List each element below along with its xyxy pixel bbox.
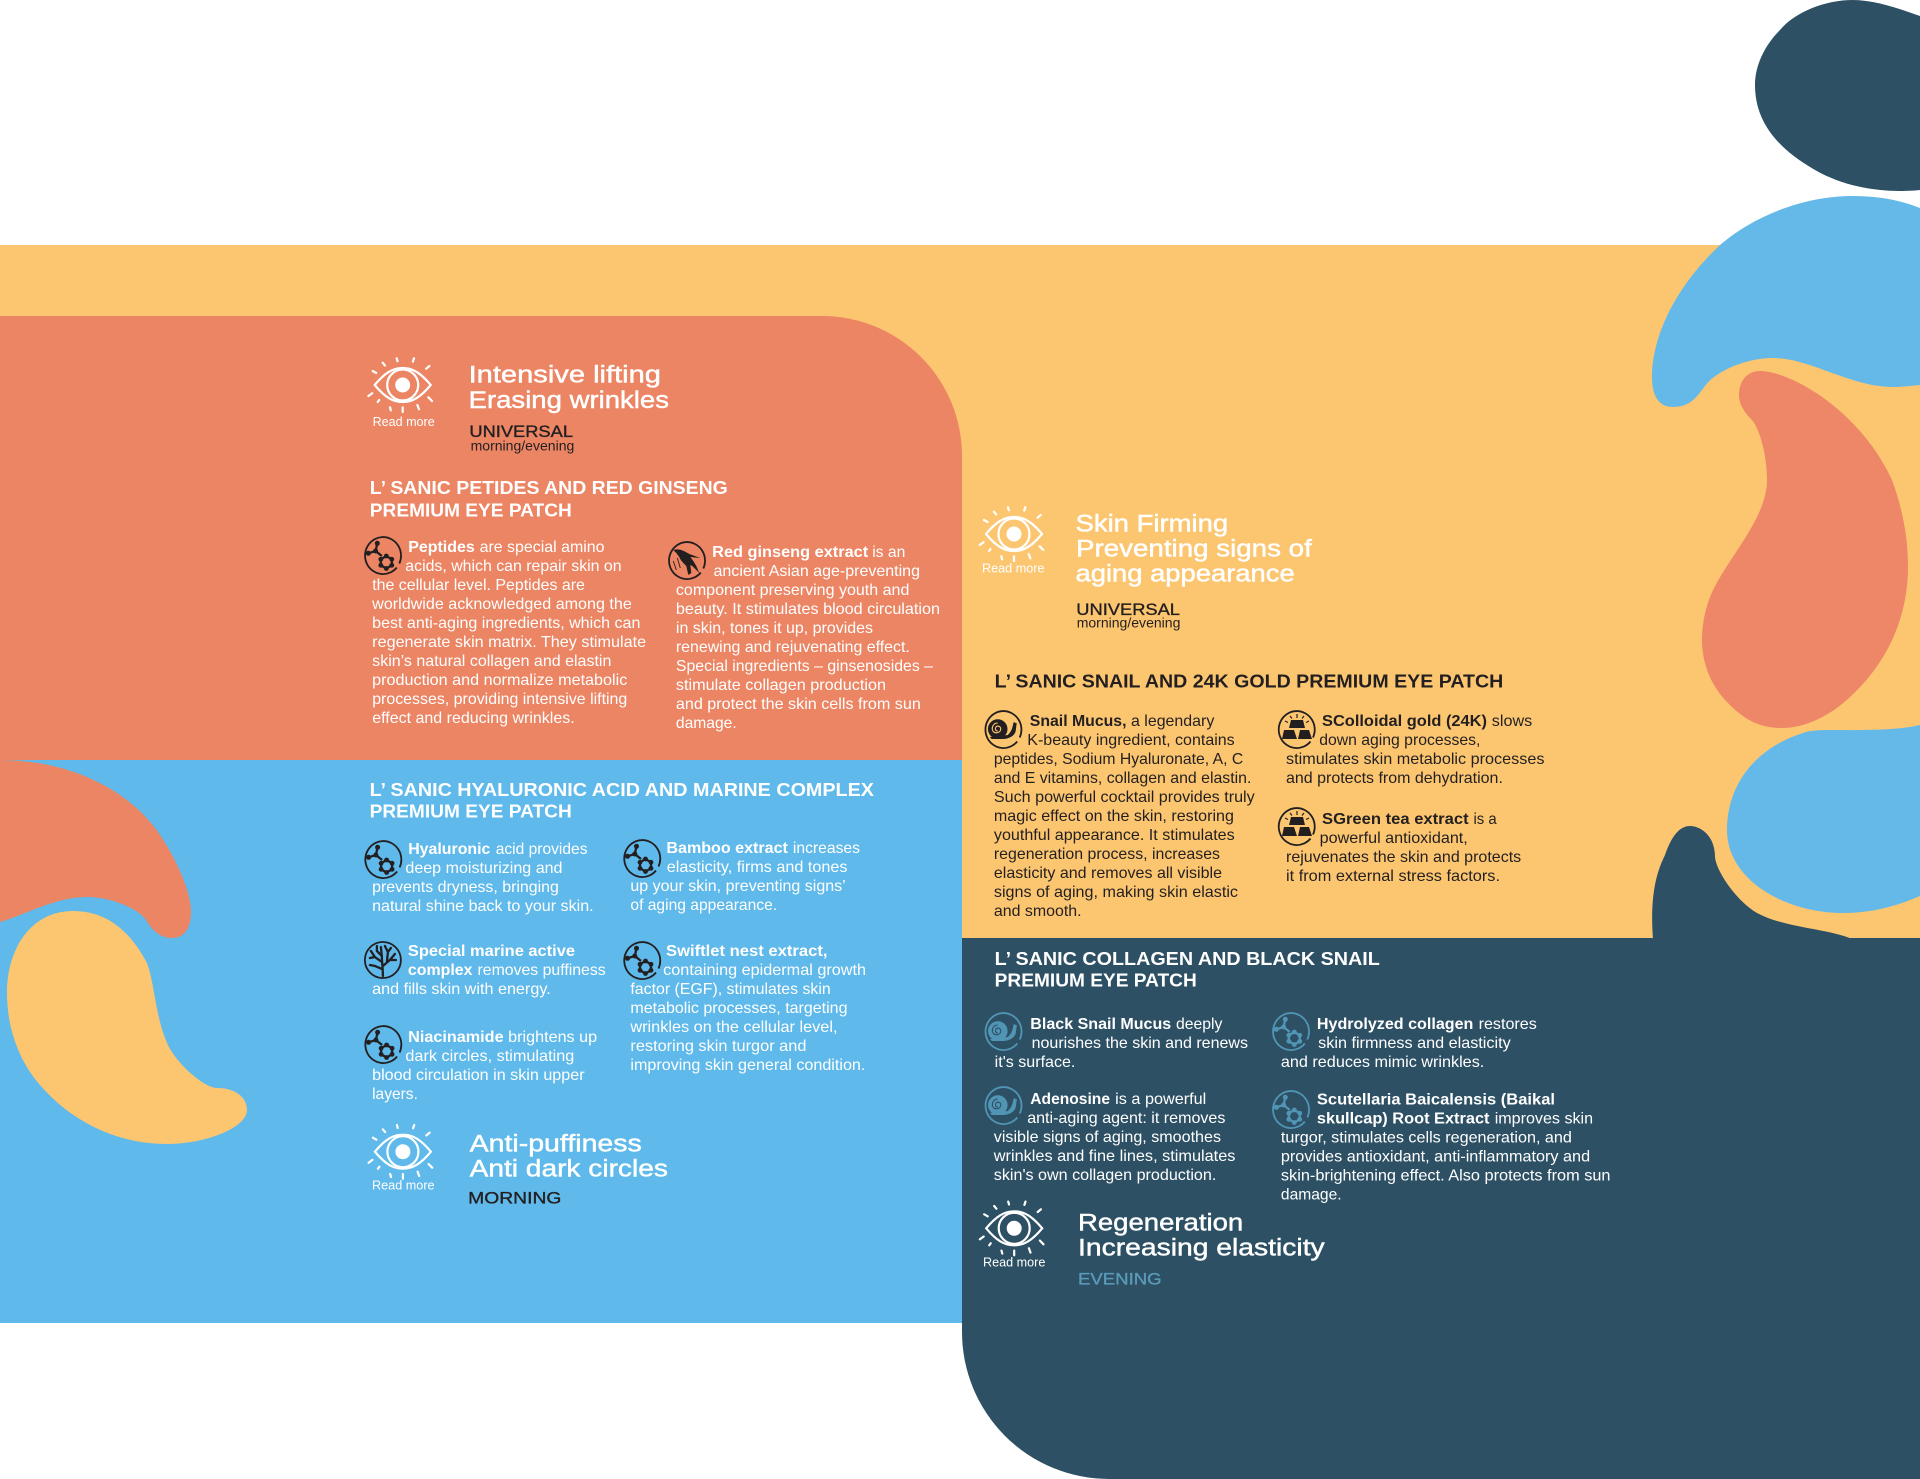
text block: snail mucus: peptides, Sodium Hyaluronate, A, C (994, 751, 1243, 768)
text block: snail mucus: Such powerful cocktail provides truly (994, 789, 1255, 806)
blob: blue upper right (1652, 196, 1920, 407)
text block: green tea: it from external stress factors. (1286, 868, 1500, 885)
text block: swiftlet nest (629, 943, 866, 1074)
heading: collagen and black snail patch: L’ SANIC COLLAGEN AND BLACK SNAIL (995, 949, 1380, 969)
text block: hyaluronic acid: natural shine back to your skin. (372, 898, 594, 915)
text block: scutellaria: provides antioxidant, anti-inflammatory and (1281, 1149, 1590, 1166)
blob: yellow left (7, 911, 247, 1144)
eye icon with read more: firming: Read more (982, 561, 1044, 576)
usage label: universal: UNIVERSAL (469, 422, 573, 441)
text block: hydrolyzed collagen: skin firmness and elasticity (1318, 1035, 1511, 1052)
text block: colloidal gold: and protects from dehydration. (1286, 770, 1503, 787)
text block: black snail mucus (995, 1016, 1248, 1071)
text block: scutellaria: skin-brightening effect. Also protects from sun (1281, 1168, 1610, 1185)
icon: molecule (1273, 1091, 1309, 1128)
title: anti-puffiness benefits (470, 1131, 668, 1183)
icon: molecule (624, 942, 660, 979)
blob: dark lump above dark panel (1652, 826, 1852, 939)
heading: peptides and ginseng patch: PREMIUM EYE PATCH (370, 501, 572, 521)
heading: hyaluronic and marine patch: L’ SANIC HYALURONIC ACID AND MARINE COMPLEX (370, 780, 874, 800)
icon: gold bars (green tea) (1279, 808, 1315, 845)
text block: peptides: processes, providing intensive lifting (372, 691, 627, 708)
usage label: evening: EVENING (1078, 1269, 1162, 1288)
text block: green tea: SGreen tea extract (1322, 811, 1469, 828)
icon: molecule (365, 841, 401, 878)
text block: swiftlet nest: restoring skin turgor and (630, 1038, 806, 1055)
title: firming benefits (1076, 511, 1312, 588)
panel: anti-puffiness (blue) (0, 760, 962, 1323)
text block: niacinamide: Niacinamide (408, 1029, 504, 1046)
text block: snail mucus: K-beauty ingredient, contains (1027, 732, 1235, 749)
text block: black snail mucus: it's surface. (995, 1054, 1075, 1071)
text block: snail mucus: regeneration process, increases (994, 846, 1220, 863)
blob: dark top right (1755, 0, 1920, 191)
text block: swiftlet nest: factor (EGF), stimulates skin (630, 981, 831, 998)
text block: hyaluronic acid: Hyaluronic (408, 841, 491, 858)
text block: peptides: best anti-aging ingredients, which can (372, 615, 640, 632)
text block: hyaluronic acid (372, 841, 594, 915)
eye icon with read more: regeneration (980, 1202, 1045, 1270)
text block: green tea: is a (1474, 811, 1497, 828)
text block: marine complex: complex (408, 962, 473, 979)
eye icon with read more: lifting: Read more (373, 414, 435, 429)
text block: red ginseng: in skin, tones it up, provides (676, 620, 873, 637)
text block: swiftlet nest: Swiftlet nest extract, (666, 943, 828, 960)
text block: red ginseng: and protect the skin cells from sun (676, 696, 921, 713)
text block: snail mucus: and E vitamins, collagen and elastin. (994, 770, 1251, 787)
text block: peptides: the cellular level. Peptides are (372, 577, 585, 594)
icon: snail (985, 711, 1021, 748)
text block: adenosine: visible signs of aging, smoothes (994, 1129, 1221, 1146)
text block: hyaluronic acid: deep moisturizing and (405, 860, 562, 877)
text block: marine complex: removes puffiness (478, 962, 606, 979)
panel: regeneration (dark) (962, 938, 1920, 1479)
text block: scutellaria: skullcap) Root Extract (1317, 1111, 1490, 1128)
text block: hydrolyzed collagen: restores (1479, 1016, 1537, 1033)
text block: black snail mucus: nourishes the skin and renews (1032, 1035, 1248, 1052)
text block: colloidal gold (1286, 713, 1544, 787)
text block: adenosine: wrinkles and fine lines, stimulates (993, 1148, 1235, 1165)
title: lifting benefits: Erasing wrinkles (469, 387, 669, 414)
text block: snail mucus: and smooth. (994, 903, 1082, 920)
text block: black snail mucus: deeply (1176, 1016, 1222, 1033)
text block: niacinamide: brightens up (508, 1029, 597, 1046)
text block: hydrolyzed collagen (1281, 1016, 1537, 1071)
text block: green tea (1286, 811, 1521, 885)
icon: molecule (624, 840, 660, 877)
usage label: universal (469, 422, 574, 454)
title: regeneration benefits: Increasing elasticity (1078, 1235, 1325, 1262)
text block: adenosine: skin's own collagen production. (994, 1167, 1216, 1184)
icon: marine coral (365, 942, 401, 978)
text block: bamboo extract: Bamboo extract (666, 840, 789, 857)
text block: bamboo extract: of aging appearance. (630, 897, 777, 914)
text block: colloidal gold: stimulates skin metabolic processes (1286, 751, 1544, 768)
title: firming benefits: Preventing signs of (1076, 536, 1312, 563)
icon: snail (986, 1013, 1022, 1050)
text block: peptides (371, 539, 646, 727)
text block: scutellaria (1281, 1092, 1610, 1204)
icon: gold bars (1279, 711, 1315, 748)
title: anti-puffiness benefits: Anti dark circles (470, 1156, 668, 1183)
text block: red ginseng: renewing and rejuvenating effect. (676, 639, 910, 656)
heading: peptides and ginseng patch: L’ SANIC PETIDES AND RED GINSENG (370, 478, 728, 498)
heading: hyaluronic and marine patch (370, 780, 874, 821)
usage label: universal: UNIVERSAL (1076, 600, 1180, 619)
heading: peptides and ginseng patch (370, 478, 728, 521)
text block: niacinamide (372, 1029, 597, 1103)
text block: red ginseng (676, 544, 940, 732)
text block: swiftlet nest: improving skin general condition. (630, 1057, 865, 1074)
text block: scutellaria: turgor, stimulates cells regeneration, and (1281, 1130, 1572, 1147)
text block: black snail mucus: Black Snail Mucus (1030, 1016, 1171, 1033)
text block: adenosine (993, 1091, 1235, 1184)
text block: peptides: Peptides (408, 539, 475, 556)
text block: red ginseng: Red ginseng extract (712, 544, 869, 561)
text block: peptides: are special amino (480, 539, 605, 556)
panel: firming (yellow) (0, 245, 1920, 938)
text block: snail mucus: elasticity and removes all visible (994, 865, 1222, 882)
text block: colloidal gold: down aging processes, (1319, 732, 1480, 749)
title: lifting benefits: Intensive lifting (469, 362, 661, 389)
text block: bamboo extract: up your skin, preventing signs’ (630, 878, 846, 895)
text block: snail mucus: signs of aging, making skin elastic (994, 884, 1238, 901)
text block: peptides: effect and reducing wrinkles. (372, 710, 575, 727)
text block: bamboo extract (630, 840, 860, 914)
usage label: universal (1076, 600, 1180, 631)
usage label: universal: morning/evening (1077, 615, 1180, 631)
text block: snail mucus (994, 713, 1255, 920)
text block: niacinamide: layers. (372, 1086, 418, 1103)
icon: molecule (365, 1026, 401, 1063)
icon: molecule (365, 537, 401, 574)
heading: collagen and black snail patch (995, 949, 1380, 991)
text block: marine complex (372, 943, 606, 998)
text block: hydrolyzed collagen: and reduces mimic wrinkles. (1281, 1054, 1484, 1071)
text block: red ginseng: Special ingredients – ginsenosides – (676, 658, 933, 675)
title: lifting benefits (469, 362, 669, 414)
title: regeneration benefits (1078, 1210, 1325, 1262)
text block: red ginseng: stimulate collagen production (676, 677, 886, 694)
text block: niacinamide: blood circulation in skin upper (372, 1067, 585, 1084)
text block: peptides: production and normalize metabolic (372, 672, 627, 689)
text block: hyaluronic acid: prevents dryness, bringing (372, 879, 559, 896)
text block: colloidal gold: SColloidal gold (24K) (1322, 713, 1487, 730)
text block: red ginseng: ancient Asian age-preventing (714, 563, 920, 580)
text block: niacinamide: dark circles, stimulating (405, 1048, 574, 1065)
heading: snail and gold patch: L’ SANIC SNAIL AND 24K GOLD PREMIUM EYE PATCH (995, 672, 1503, 692)
title: firming benefits: Skin Firming (1076, 511, 1228, 538)
text block: marine complex: Special marine active (408, 943, 575, 960)
text block: red ginseng: beauty. It stimulates blood circulation (676, 601, 940, 618)
text block: red ginseng: component preserving youth and (676, 582, 909, 599)
text block: bamboo extract: elasticity, firms and tones (667, 859, 848, 876)
eye icon with read more: anti-puffiness: Read more (372, 1177, 435, 1192)
icon: molecule (1273, 1013, 1309, 1050)
text block: red ginseng: damage. (676, 715, 737, 732)
text block: bamboo extract: increases (793, 840, 860, 857)
text block: snail mucus: youthful appearance. It stimulates (994, 827, 1235, 844)
text block: swiftlet nest: wrinkles on the cellular level, (629, 1019, 838, 1036)
text block: green tea: powerful antioxidant, (1320, 830, 1468, 847)
heading: hyaluronic and marine patch: PREMIUM EYE PATCH (370, 801, 572, 821)
blob: blue lower right (1727, 725, 1920, 913)
eye icon with read more: regeneration: Read more (983, 1255, 1045, 1270)
text block: snail mucus: a legendary (1131, 713, 1214, 730)
eye icon with read more: firming (980, 507, 1044, 576)
text block: swiftlet nest: metabolic processes, targeting (630, 1000, 848, 1017)
icon: snail (986, 1087, 1022, 1124)
text block: peptides: regenerate skin matrix. They stimulate (372, 634, 646, 651)
heading: collagen and black snail patch: PREMIUM EYE PATCH (995, 971, 1197, 991)
title: anti-puffiness benefits: Anti-puffiness (470, 1131, 642, 1158)
eye icon with read more: lifting (368, 358, 435, 429)
text block: peptides: acids, which can repair skin on (405, 558, 622, 575)
text block: hydrolyzed collagen: Hydrolyzed collagen (1317, 1016, 1473, 1033)
text block: colloidal gold: slows (1492, 713, 1532, 730)
title: regeneration benefits: Regeneration (1078, 1210, 1243, 1237)
usage label: morning: MORNING (468, 1188, 561, 1207)
text block: snail mucus: Snail Mucus, (1030, 713, 1126, 730)
text block: scutellaria: Scutellaria Baicalensis (Baikal (1317, 1092, 1555, 1109)
blob: coral left (0, 760, 191, 938)
icon: ginseng root (669, 542, 705, 579)
eye icon with read more: anti-puffiness (369, 1125, 435, 1192)
text block: adenosine: is a powerful (1115, 1091, 1206, 1108)
title: firming benefits: aging appearance (1076, 561, 1295, 588)
text block: red ginseng: is an (872, 544, 905, 561)
usage label: universal: morning/evening (471, 438, 574, 454)
text block: scutellaria: improves skin (1495, 1111, 1593, 1128)
text block: peptides: skin’s natural collagen and elastin (372, 653, 611, 670)
blob: coral right (1702, 371, 1908, 728)
text block: peptides: worldwide acknowledged among the (371, 596, 632, 613)
text block: adenosine: Adenosine (1030, 1091, 1110, 1108)
text block: marine complex: and fills skin with energy. (372, 981, 551, 998)
panel: lifting (coral) (0, 316, 962, 760)
text block: swiftlet nest: containing epidermal growth (663, 962, 866, 979)
text block: green tea: rejuvenates the skin and protects (1286, 849, 1521, 866)
text block: adenosine: anti-aging agent: it removes (1027, 1110, 1225, 1127)
text block: scutellaria: damage. (1281, 1187, 1342, 1204)
text block: snail mucus: magic effect on the skin, restoring (994, 808, 1234, 825)
text block: hyaluronic acid: acid provides (496, 841, 588, 858)
